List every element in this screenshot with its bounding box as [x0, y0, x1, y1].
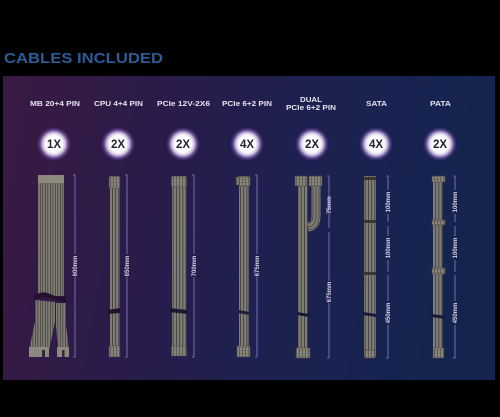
column: DUAL PCIe 6+2 PIN: 2X	[305, 139, 319, 151]
column: PATA: 2X	[433, 139, 447, 151]
column: PATA: 450mm	[453, 303, 459, 323]
column: DUAL PCIe 6+2 PIN: 75mm	[327, 196, 333, 214]
column: DUAL PCIe 6+2 PIN: PCIe 6+2 PIN	[286, 105, 336, 112]
column: CPU 4+4 PIN: 650mm	[125, 256, 131, 276]
column: SATA: 100mm	[386, 238, 392, 258]
column: PCIe 6+2 PIN: 675mm	[255, 256, 261, 276]
column: PCIe 6+2 PIN	[222, 101, 272, 357]
column: PCIe 12V-2X6: 2X	[176, 139, 190, 151]
column: PATA	[423, 101, 459, 358]
column: SATA	[359, 101, 393, 358]
column: SATA: 450mm	[386, 303, 392, 323]
column: SATA: SATA	[366, 101, 387, 108]
column: MB 20+4 PIN	[29, 101, 80, 357]
column: SATA: 100mm	[386, 192, 392, 212]
panel: cables	[3, 76, 495, 380]
column: PCIe 12V-2X6: PCIe 12V-2X6	[157, 101, 210, 108]
column: MB 20+4 PIN: MB 20+4 PIN	[30, 101, 80, 108]
column: PATA: PATA	[430, 101, 451, 108]
title: CABLES INCLUDED	[4, 50, 163, 67]
column: CPU 4+4 PIN	[94, 101, 143, 357]
column: PCIe 6+2 PIN: PCIe 6+2 PIN	[222, 101, 272, 108]
column: SATA: 4X	[369, 139, 383, 151]
column: CPU 4+4 PIN: 2X	[111, 139, 125, 151]
column: CPU 4+4 PIN: CPU 4+4 PIN	[94, 101, 143, 108]
column: PATA: 100mm	[453, 238, 459, 258]
column: PATA: 100mm	[453, 192, 459, 212]
column: DUAL PCIe 6+2 PIN	[286, 97, 336, 358]
column: DUAL PCIe 6+2 PIN: DUAL	[300, 97, 323, 104]
column: PCIe 12V-2X6: 700mm	[192, 256, 198, 276]
column: MB 20+4 PIN: 1X	[47, 139, 61, 151]
column: MB 20+4 PIN: 600mm	[73, 256, 79, 276]
column: PCIe 12V-2X6	[157, 101, 210, 357]
column: PCIe 6+2 PIN: 4X	[240, 139, 254, 151]
column: DUAL PCIe 6+2 PIN: 675mm	[327, 282, 333, 302]
